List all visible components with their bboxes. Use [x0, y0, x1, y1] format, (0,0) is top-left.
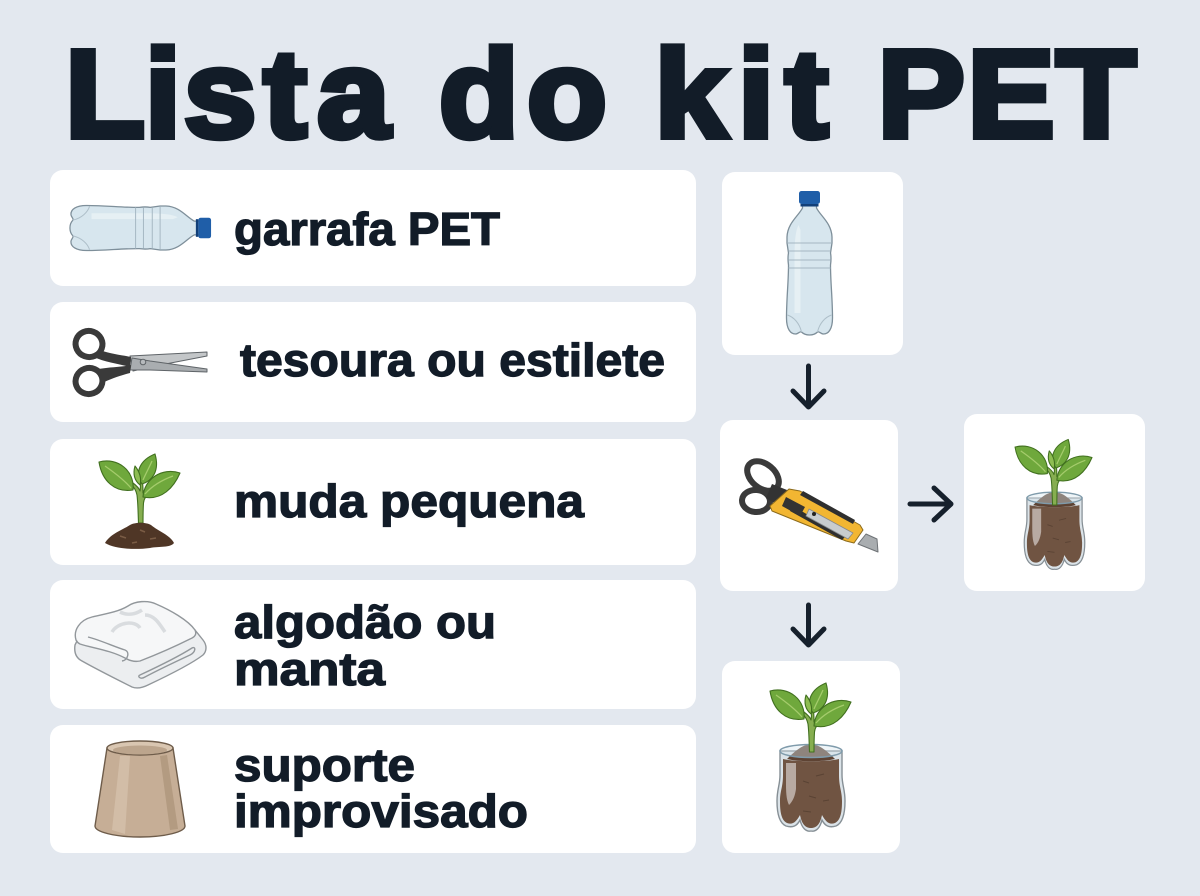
panel: step 1 bottle: [722, 172, 903, 355]
icon: seedling in cut bottle: [770, 683, 851, 831]
item: garrafa PET: [50, 170, 696, 286]
title: Lista do kit PET: [65, 25, 1136, 164]
label: suporte improvisado: improvisado: [234, 785, 528, 837]
item: muda pequena: [50, 439, 696, 565]
label: tesoura ou estilete: tesoura ou estilete: [240, 334, 665, 386]
arrow: bottle to tools: [793, 366, 824, 407]
panel: step 3 pot: [722, 661, 900, 853]
item: tesoura ou estilete: [50, 302, 696, 422]
icon: scissors and box cutter: [741, 455, 878, 552]
icon: seedling in soil: [99, 454, 180, 549]
label: algodão ou manta: manta: [234, 643, 385, 695]
icon: scissors: [72, 327, 207, 398]
arrow: tools to pot assembly: [793, 605, 824, 645]
label: algodão ou manta: [234, 596, 496, 695]
arrow: tools to finished pot: [910, 488, 951, 520]
item: suporte improvisado: [50, 725, 696, 853]
panel: kit list: [50, 170, 696, 853]
icon: seedling in cut bottle: [1015, 439, 1092, 569]
icon: upright PET bottle: [786, 191, 832, 335]
icon: folded cotton blanket: [75, 602, 206, 688]
panel: step 2 tools: [720, 420, 898, 591]
icon: horizontal PET bottle: [70, 205, 211, 251]
label: garrafa PET: garrafa PET: [234, 203, 500, 255]
label: suporte improvisado: [234, 739, 528, 837]
label: muda pequena: muda pequena: [234, 475, 584, 527]
panel: step 4 planted pot: [964, 414, 1145, 591]
item: algodão ou manta: [50, 580, 696, 709]
label: suporte improvisado: suporte: [234, 739, 415, 791]
icon: improvised support: [95, 741, 185, 837]
label: algodão ou manta: algodão ou: [234, 596, 496, 648]
